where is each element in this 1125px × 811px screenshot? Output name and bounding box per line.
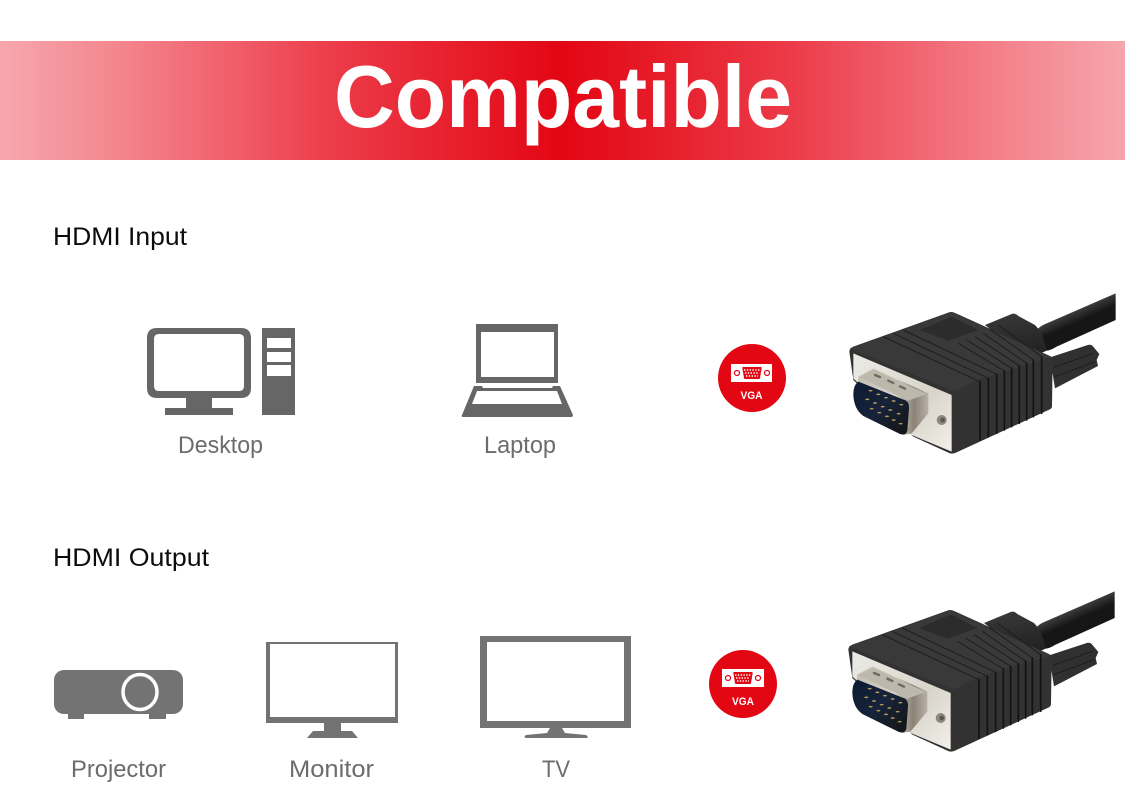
photo: VGA connector top xyxy=(849,293,1116,454)
badge: VGA top: VGA xyxy=(740,390,763,402)
heading: HDMI Output: HDMI Output xyxy=(53,544,209,572)
title banner xyxy=(0,41,1125,160)
label: Laptop: Laptop xyxy=(484,432,556,459)
title: Compatible xyxy=(334,47,792,146)
badge: VGA bottom xyxy=(709,650,777,718)
badge: VGA bottom: VGA xyxy=(732,696,754,708)
label: TV: TV xyxy=(542,756,570,783)
icon: monitor xyxy=(266,642,398,738)
label: Desktop: Desktop xyxy=(178,432,263,459)
photo: VGA connector bottom xyxy=(848,591,1115,752)
badge: VGA top xyxy=(718,344,786,412)
label: Projector: Projector xyxy=(71,756,166,783)
heading: HDMI Input: HDMI Input xyxy=(53,223,187,251)
label: Monitor: Monitor xyxy=(289,756,374,783)
icon: TV xyxy=(480,636,631,738)
icon: desktop xyxy=(147,328,295,415)
icon: laptop xyxy=(462,324,573,417)
icon: projector xyxy=(54,670,183,719)
